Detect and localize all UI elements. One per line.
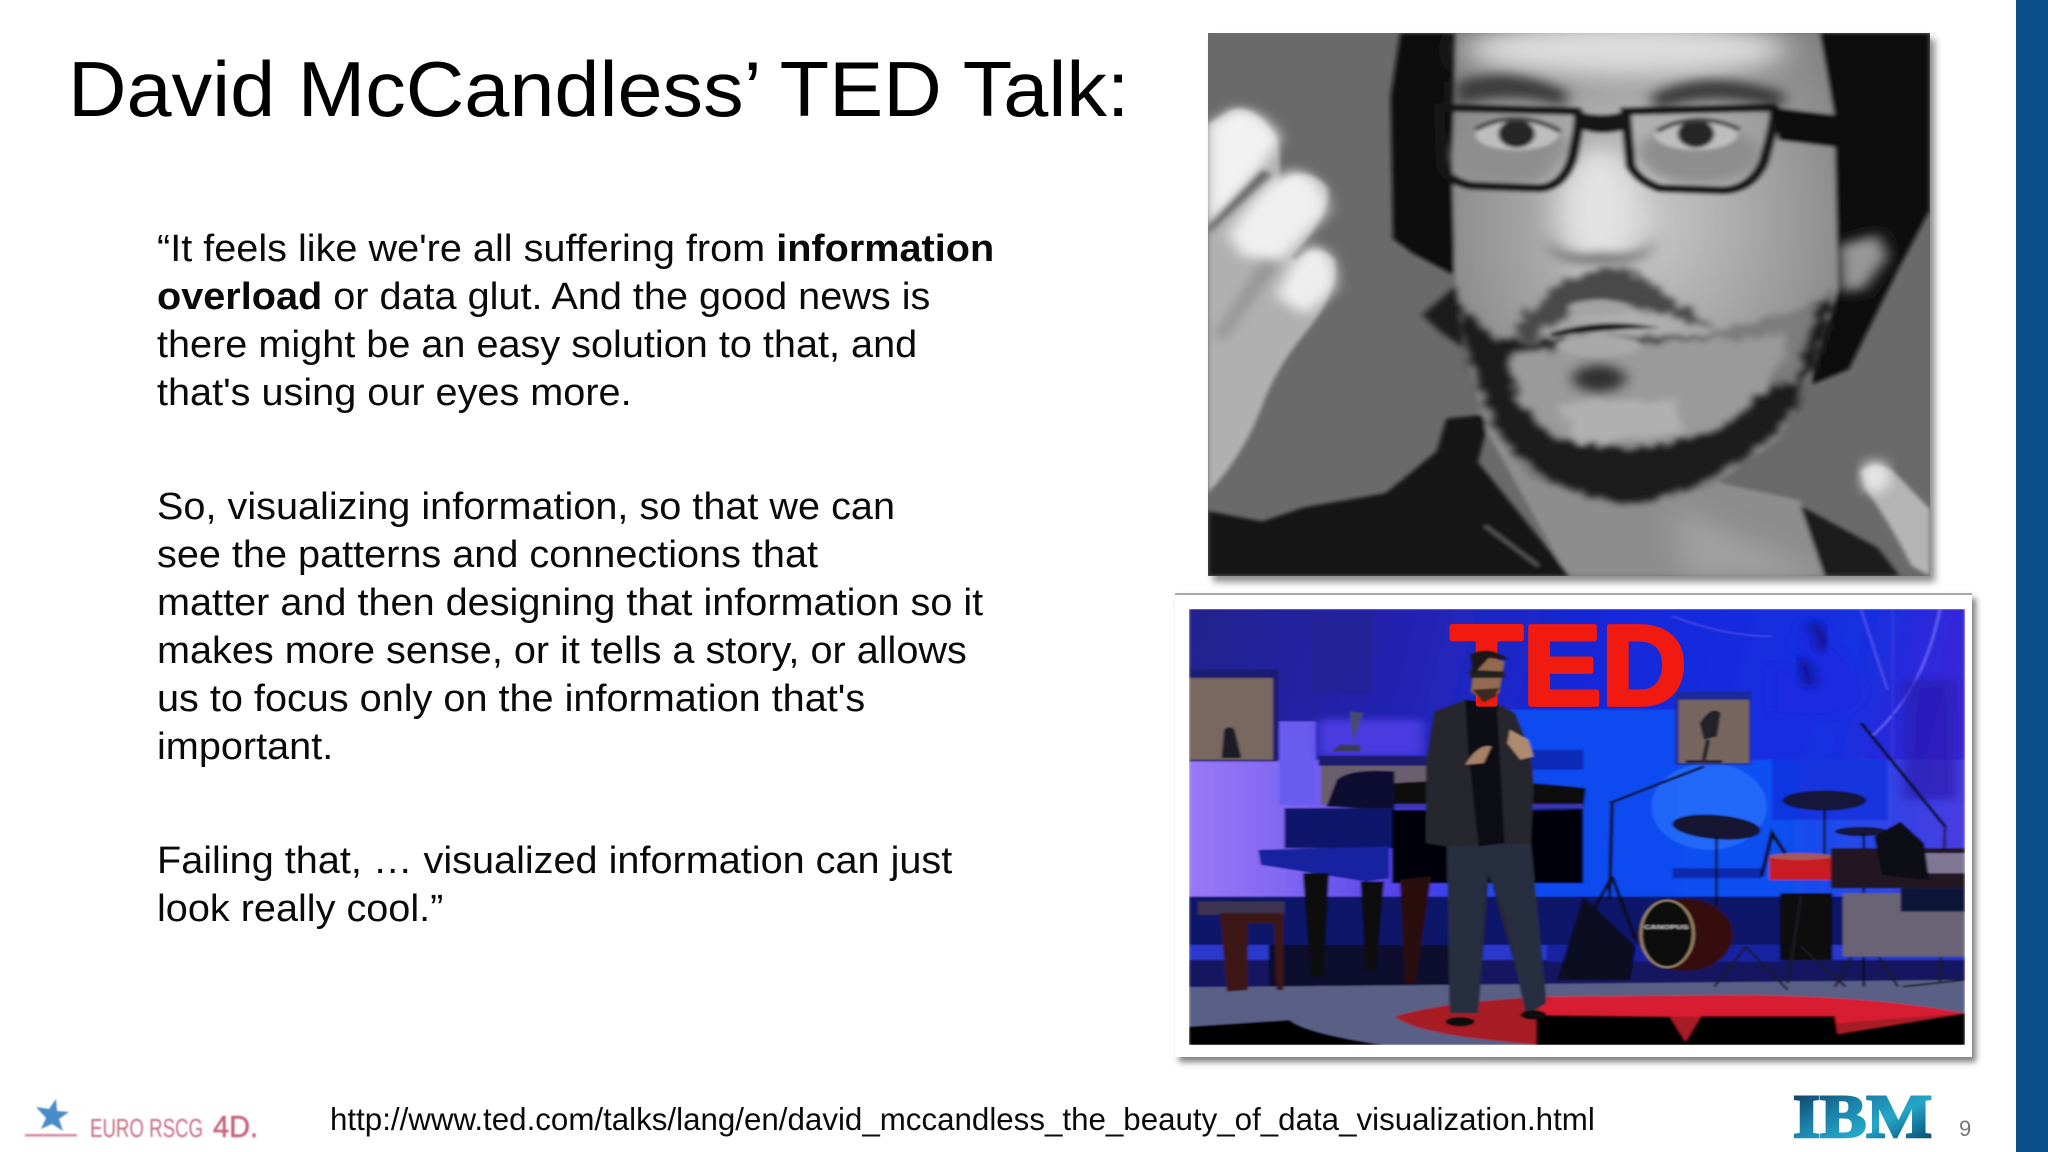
icon: star: [36, 1099, 69, 1131]
right edge colour bar: [2016, 0, 2048, 1152]
photo: David McCandless on the TED stage: [1189, 609, 1965, 1045]
quote paragraph 1: that's using our eyes more.: [157, 372, 632, 414]
quote paragraph 2: [157, 486, 983, 768]
TED sign: [1451, 602, 1687, 729]
lower band of stage front: [1189, 945, 1965, 962]
forehead highlight: [1466, 24, 1786, 75]
quote paragraph 3: Failing that, … visualized information can just: [157, 840, 952, 882]
lower illuminated wall: [1189, 760, 1965, 900]
quote paragraph 2: us to focus only on the information that's: [157, 678, 865, 720]
quote paragraph 2: So, visualizing information, so that we can: [157, 486, 895, 528]
title: David McCandless’ TED Talk:: [68, 45, 1129, 133]
snare drum: [1769, 857, 1831, 880]
hair left: [1391, 33, 1459, 275]
logo: Euro RSCG 4D: 4D.: [213, 1109, 258, 1144]
quote paragraph 1: [157, 228, 994, 414]
photo: portrait of David McCandless: [1208, 33, 1930, 576]
glasses: [1439, 108, 1579, 188]
stage wall letterforms: [1772, 620, 1862, 717]
quote paragraph 2: matter and then designing that information so it: [157, 582, 983, 624]
right instruments: [1843, 893, 1965, 957]
sideburn: [1422, 286, 1463, 348]
quote paragraph 3: [157, 840, 952, 930]
photo frame: TED stage: [1175, 593, 1972, 1057]
quote paragraph 2: important.: [157, 726, 333, 768]
quote paragraph 1: “It feels like we're all suffering from information: [157, 228, 994, 270]
quote paragraph 1: there might be an easy solution to that, and: [157, 324, 917, 366]
left hand: [1208, 109, 1336, 493]
face: [1452, 33, 1838, 502]
eyes: [1475, 120, 1558, 150]
photo: David McCandless on the TED stage: CANOPUS: [1644, 924, 1688, 931]
red carpet: [1395, 995, 1965, 1045]
quote paragraph 3: look really cool.”: [157, 888, 443, 930]
quote paragraph 2: see the patterns and connections that: [157, 534, 818, 576]
soul patch: [1572, 365, 1626, 392]
quote paragraph 2: makes more sense, or it tells a story, or allows: [157, 630, 967, 672]
shirt: [1208, 415, 1570, 576]
eyebrows: [1456, 75, 1568, 108]
speaker shoes: [1445, 1017, 1475, 1026]
speaker hands: [1465, 746, 1492, 765]
quote paragraph 1: overload or data glut. And the good news is: [157, 276, 930, 318]
foreground black monitors: [1536, 1013, 1965, 1045]
speaker body: [1426, 700, 1547, 1013]
moustache: [1514, 266, 1713, 348]
beard lighter patches: [1509, 333, 1786, 447]
ear: [1839, 235, 1887, 291]
shelf niches: [1189, 670, 1278, 761]
bass drum: [1638, 899, 1733, 971]
logo: Euro RSCG 4D: [24, 1098, 258, 1144]
mic stand left: [1568, 766, 1704, 957]
lips and mouth: [1568, 300, 1631, 316]
page number: 9: [1959, 1116, 1971, 1141]
piano: [1326, 771, 1395, 810]
stage floor: [1189, 980, 1965, 1045]
neck: [1483, 424, 1824, 576]
mic stand right: [1861, 723, 1945, 826]
right cheek beard: [1713, 304, 1820, 388]
drum hardware: [1714, 826, 1965, 990]
eye sockets: [1451, 126, 1577, 184]
beard base: [1454, 289, 1835, 503]
piano bench: [1198, 902, 1284, 915]
right finger: [1861, 465, 1930, 576]
cymbals: [1670, 811, 1763, 843]
speaker head: [1469, 651, 1509, 702]
nose: [1558, 148, 1640, 271]
logo: Euro RSCG 4D: EURO RSCG: [90, 1113, 203, 1143]
source URL: http://www.ted.com/talks/lang/en/david_mccandless_the_beauty_of_data_visualization.html: [330, 1102, 1595, 1137]
hair right: [1812, 33, 1930, 384]
shirt collar stitch: [1485, 526, 1538, 566]
